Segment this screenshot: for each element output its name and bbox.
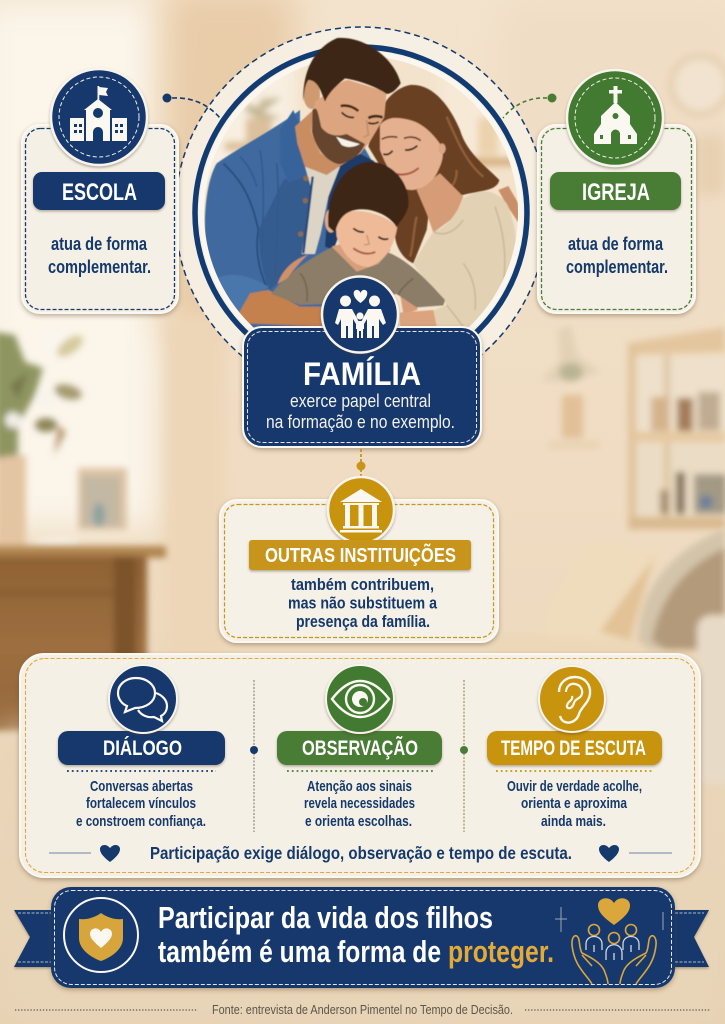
table (0, 546, 166, 731)
icon: família (322, 276, 398, 352)
label: igreja: IGREJA (582, 179, 650, 206)
text: observação: revela necessidades (304, 795, 415, 812)
panel: participação (20, 654, 700, 877)
column: tempo de escuta (487, 666, 662, 830)
shelf right (628, 327, 725, 530)
ribbon tails (14, 910, 709, 967)
outer medallion (175, 27, 547, 399)
text: outras instituições (288, 575, 437, 631)
family figures, clipped bodies (205, 85, 520, 332)
panel: escola (22, 69, 178, 313)
text: diálogo: fortalecem vínculos (86, 795, 196, 812)
text: família: exerce papel central (290, 390, 431, 411)
label: observação (277, 731, 442, 765)
text: tempo de escuta (507, 778, 642, 830)
text: igreja: complementar. (566, 257, 668, 277)
icon: chat bubbles (109, 665, 177, 733)
connector: escola to família (162, 94, 220, 118)
text: tempo de escuta: orienta e aproxima (521, 795, 628, 812)
text: outras instituições: presença da família. (296, 612, 430, 631)
label: igreja (550, 172, 681, 210)
vase right (541, 325, 600, 449)
connector: igreja to família (503, 94, 556, 118)
text: igreja (566, 234, 668, 277)
headline: Participar da vida dos filhos (158, 900, 493, 935)
heading: família: FAMÍLIA (303, 356, 421, 392)
plant and vase left (0, 329, 86, 550)
banner (14, 887, 709, 988)
man: shirt (205, 108, 375, 332)
closing line with hearts: Participação exige diálogo, observação e tempo de escuta. (150, 843, 572, 863)
label: escola (33, 172, 165, 210)
text: observação: Atenção aos sinais (307, 778, 412, 795)
text: diálogo (76, 778, 206, 830)
label: escola: ESCOLA (62, 179, 137, 206)
headline (158, 900, 554, 969)
icon: escola (51, 69, 147, 165)
headline: também é uma forma de (158, 934, 441, 969)
label: observação: OBSERVAÇÃO (302, 737, 418, 760)
text: outras instituições: também contribuem, (291, 575, 434, 594)
label: diálogo: DIÁLOGO (103, 737, 182, 760)
text: escola: atua de forma (51, 234, 148, 254)
boy (272, 162, 445, 307)
icon: shield with heart (64, 898, 138, 972)
man: head (303, 38, 401, 165)
headline: proteger. (448, 934, 554, 969)
icon: hands holding family (555, 898, 663, 984)
text: tempo de escuta: Ouvir de verdade acolhe, (507, 778, 642, 795)
text: escola: complementar. (48, 257, 151, 277)
label: diálogo (58, 731, 225, 765)
column: observação (277, 665, 442, 830)
label: tempo de escuta (487, 731, 662, 765)
panel: igreja (538, 70, 695, 313)
text: tempo de escuta: ainda mais. (541, 813, 606, 830)
text: igreja: atua de forma (568, 234, 664, 254)
icon: ear (539, 666, 605, 732)
separator: navy (250, 680, 258, 832)
panel: outras instituições (220, 477, 498, 642)
separator: green (460, 680, 468, 832)
icon: igreja (567, 70, 663, 166)
text: diálogo: e constroem confiança. (76, 813, 206, 830)
label: tempo de escuta: TEMPO DE ESCUTA (501, 737, 646, 760)
icon: instituição (328, 477, 394, 543)
text: família: na formação e no exemplo. (266, 411, 455, 432)
central family portrait (179, 26, 537, 357)
text: observação: e orienta escolhas. (305, 813, 412, 830)
text: outras instituições: mas não substituem a (288, 594, 437, 612)
connector: família to outras instituições (356, 449, 366, 478)
photo frame (36, 468, 127, 549)
photo backdrop (204, 58, 518, 327)
text: escola (48, 234, 151, 277)
text: diálogo: Conversas abertas (90, 778, 193, 795)
source line: Fonte: entrevista de Anderson Pimentel no Tempo de Decisão. (212, 1002, 513, 1017)
sofa right (490, 528, 725, 785)
text: observação (304, 778, 415, 830)
column: diálogo (58, 665, 225, 830)
label: outras instituições (249, 540, 471, 570)
panel: família (243, 276, 481, 447)
label: outras instituições: OUTRAS INSTITUIÇÕES (265, 543, 456, 567)
icon: eye (326, 665, 394, 733)
text: família (266, 390, 455, 432)
woman (368, 85, 520, 332)
